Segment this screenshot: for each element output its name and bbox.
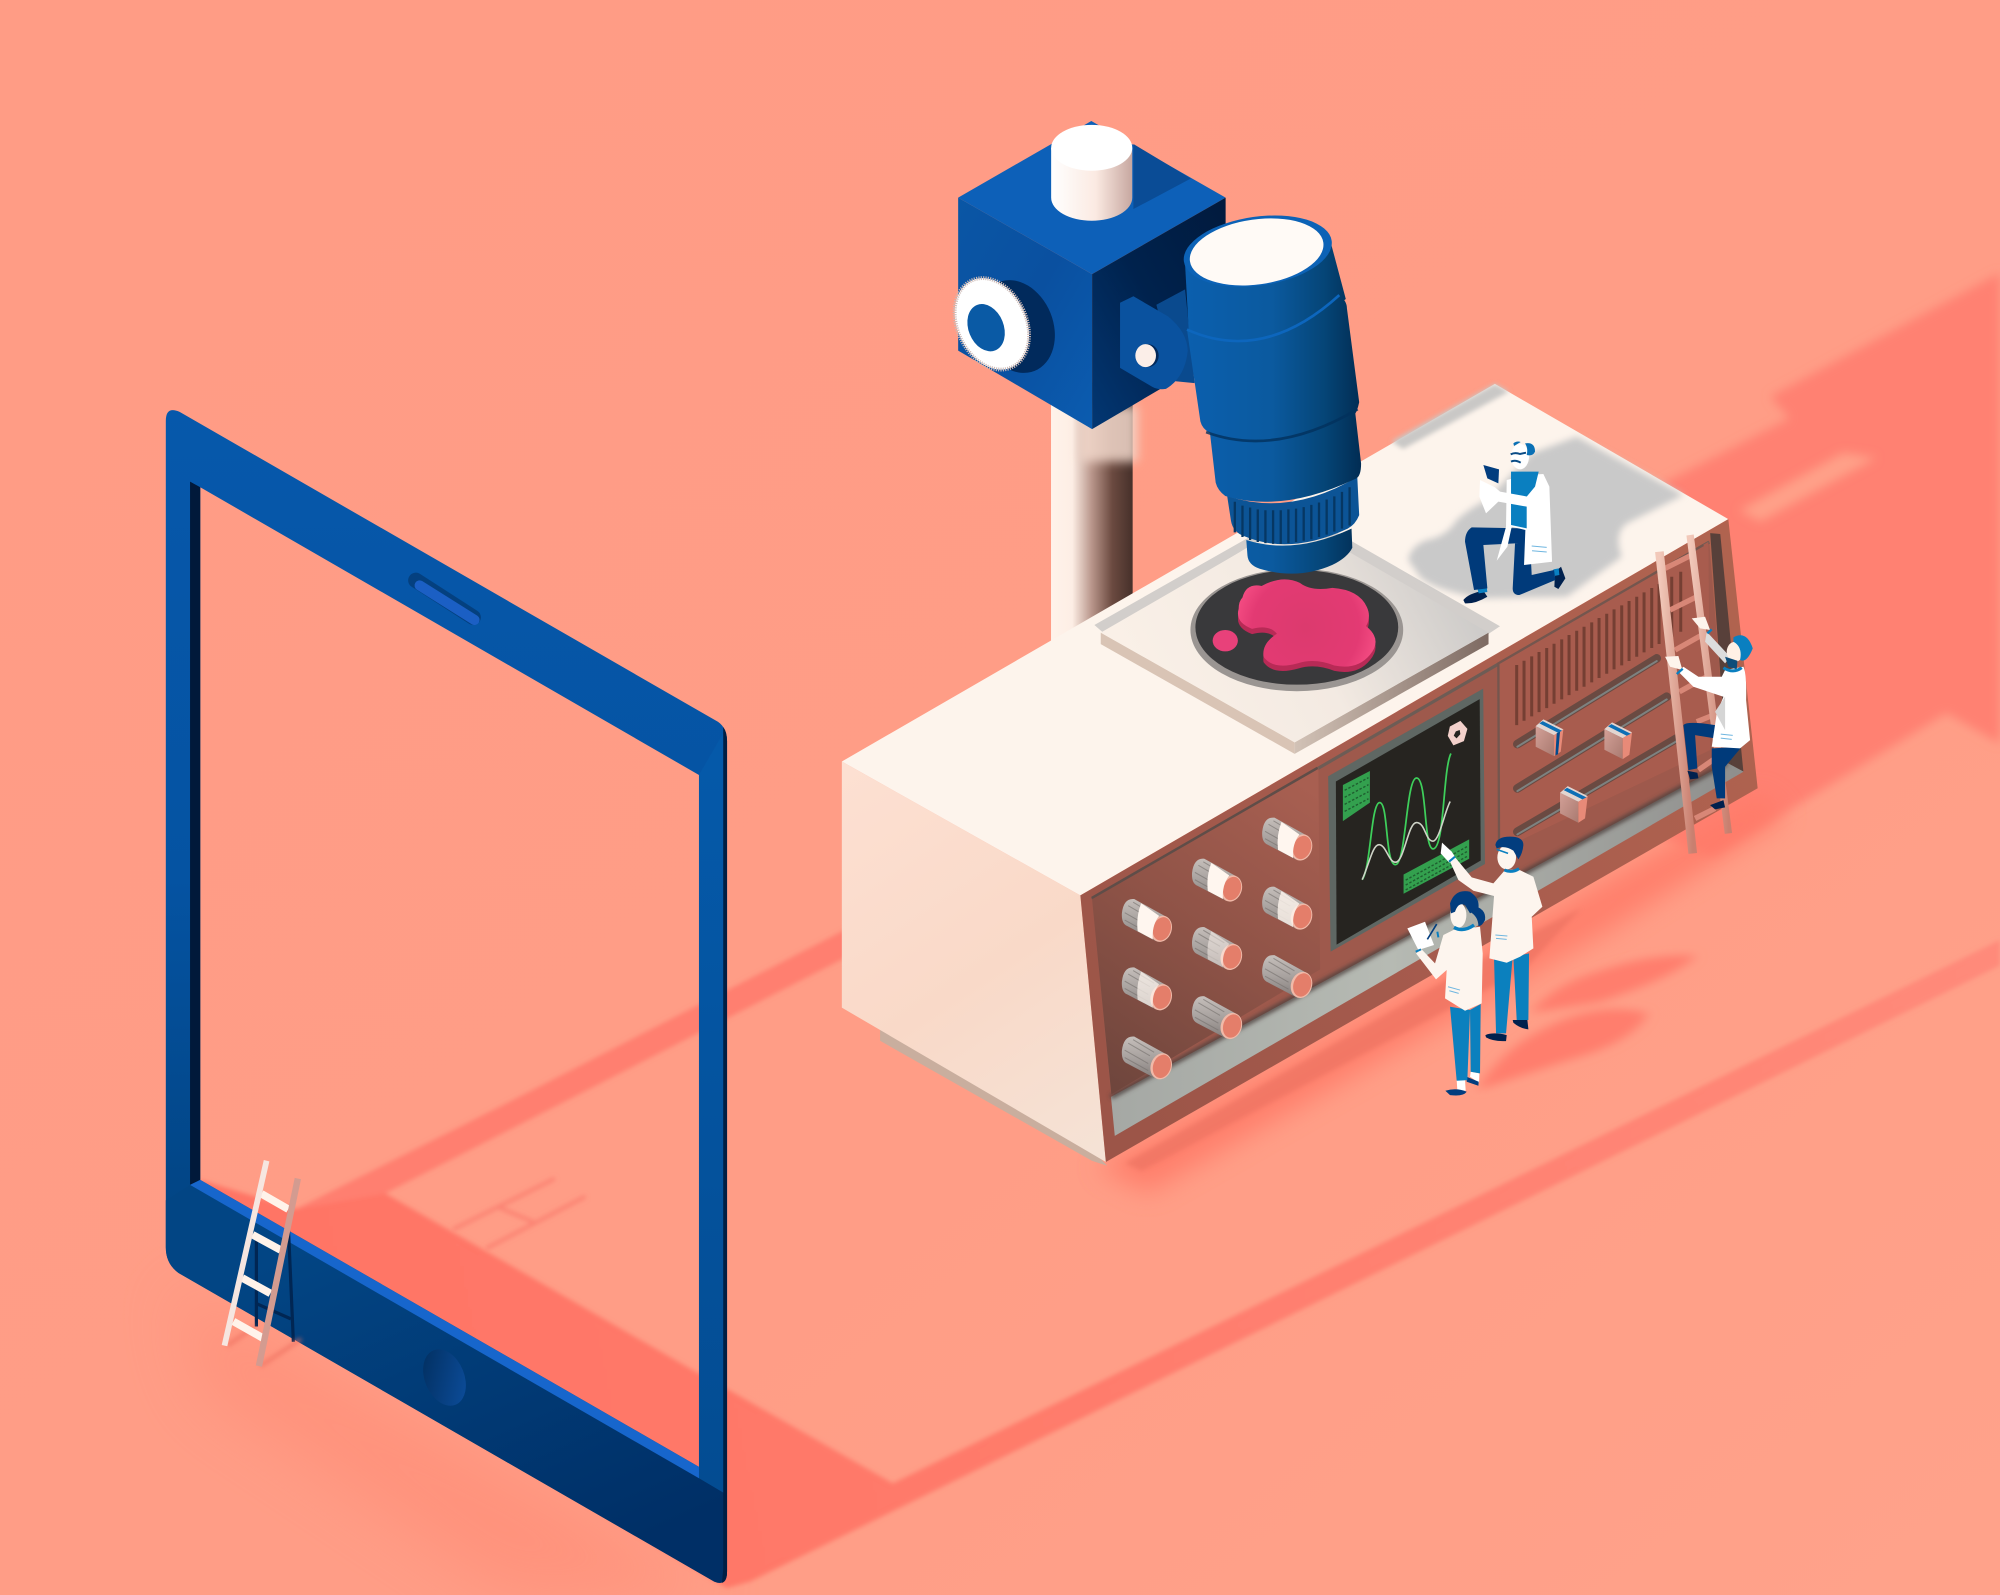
tablet: bottom bezel <box>166 1185 727 1583</box>
barrel: seam under sleeve <box>1206 409 1358 441</box>
shadow: woman <box>1476 1009 1648 1091</box>
screen: frame <box>1328 689 1485 952</box>
climber: beard <box>1725 657 1737 669</box>
shadow: bottom frame and long band <box>200 940 2000 1588</box>
woman at screen <box>1407 891 1485 1095</box>
cube: top shadow <box>1133 144 1191 209</box>
console: right recess <box>1710 533 1743 772</box>
knob 5 <box>1192 927 1245 973</box>
climber: shoes <box>1687 771 1725 809</box>
screen: text block scan lines <box>1345 778 1467 890</box>
small ladder: rungs <box>233 1194 288 1338</box>
pillar upper light <box>1079 406 1138 462</box>
slider track 2 <box>1517 697 1667 791</box>
man: legs <box>1494 953 1529 1033</box>
console: base <box>880 1028 1107 1166</box>
scientist kneeling on top <box>1463 442 1565 603</box>
barrel: middle section <box>1210 414 1361 502</box>
knobs <box>1122 818 1316 1082</box>
stage: left side <box>1101 633 1295 754</box>
console: front slanted face <box>1080 519 1758 1162</box>
shadows: scientists on floor <box>1476 955 1697 1091</box>
scientist climbing ladder <box>1665 617 1753 809</box>
vent panel <box>1498 542 1710 850</box>
vent slots <box>1517 572 1681 725</box>
kneeling: shoes <box>1463 567 1565 603</box>
climber: coat <box>1678 667 1750 748</box>
man: hair <box>1495 837 1523 859</box>
hinge pin <box>1135 344 1159 367</box>
man: pointing hand <box>1441 843 1456 863</box>
man at screen <box>1441 837 1542 1041</box>
climber: pocket <box>1721 734 1733 739</box>
kneeling: coat pocket <box>1532 546 1547 552</box>
specimen: small droplet <box>1213 630 1238 651</box>
dish: rim <box>1190 569 1403 691</box>
man: collar <box>1504 869 1519 871</box>
tablet: home button <box>415 1343 474 1412</box>
barrel: wide sleeve <box>1187 295 1359 443</box>
console: top face <box>842 384 1728 895</box>
small ladder: floor shadow <box>227 1327 301 1366</box>
screen: display <box>1336 699 1481 945</box>
shadow: soft machine contact shadow <box>1097 793 1786 1193</box>
slider handle 3 <box>1560 786 1588 823</box>
oscilloscope screen <box>1328 689 1485 952</box>
woman: pen <box>1427 924 1437 939</box>
pillar body <box>1051 383 1133 644</box>
kneeling: hair <box>1513 442 1535 455</box>
cube: left face <box>958 198 1092 429</box>
vent and slider panel <box>1498 542 1710 850</box>
microscope head <box>940 121 1361 574</box>
cube: right face <box>1092 198 1226 429</box>
specimen: blob <box>1238 579 1376 667</box>
dish: inner <box>1195 570 1398 685</box>
console: back shadow strip on top <box>1392 384 1509 449</box>
man: shoes <box>1485 1020 1528 1041</box>
knob 8 <box>1192 996 1245 1042</box>
woman: head <box>1450 902 1466 928</box>
petri dish with specimen <box>1190 569 1403 691</box>
screen: text block left <box>1343 771 1370 821</box>
knob 7 <box>1262 955 1316 1001</box>
tablet: right bezel <box>699 733 727 1495</box>
cap cylinder <box>1051 125 1132 221</box>
climber: head <box>1727 642 1743 662</box>
knob 4 <box>1262 887 1316 932</box>
woman: ponytail <box>1470 905 1485 926</box>
knob 1 <box>1262 818 1316 863</box>
vent panel edge <box>1498 545 1703 848</box>
climber: legs <box>1683 723 1742 798</box>
shadow: man <box>1530 955 1697 1013</box>
console ladder: rungs <box>1665 555 1715 818</box>
knob 6 <box>1122 967 1175 1013</box>
slider track 1 <box>1517 658 1657 747</box>
floor shadow: tablet frame cast shadow <box>200 918 2000 1588</box>
climber: hair <box>1733 635 1753 661</box>
slider track 3 <box>1517 738 1677 834</box>
man: head <box>1497 845 1516 869</box>
tablet: right edge <box>722 727 727 1583</box>
stage: right side <box>1295 633 1489 754</box>
man: coat <box>1450 858 1542 963</box>
console: grey shadow on top <box>1408 437 1683 598</box>
knob 9 <box>1122 1036 1175 1082</box>
console ladder: right rail <box>1690 535 1728 833</box>
focus knob: shadow <box>965 269 1068 384</box>
screen: grey curve <box>1362 802 1450 880</box>
tablet: frame body <box>166 410 727 1583</box>
machine pillar <box>1051 383 1138 644</box>
shadow: ladder on floor inside window <box>453 1179 585 1249</box>
small ladder on tablet <box>224 1161 301 1366</box>
barrel: knurled ring <box>1227 477 1359 544</box>
knob 3 <box>1122 899 1175 945</box>
barrel: top rim <box>1179 207 1336 296</box>
woman: pocket <box>1448 987 1460 993</box>
woman: collar <box>1454 925 1474 930</box>
tablet: ladder shadow on bezel <box>256 1224 293 1342</box>
woman: feet <box>1457 1072 1479 1091</box>
stage: top <box>1101 520 1489 742</box>
console ladder <box>1659 535 1728 853</box>
shadow: upper thin band <box>296 918 867 1209</box>
climber: raised arm <box>1705 632 1730 663</box>
slider handle 1 <box>1536 719 1563 756</box>
barrel: top section <box>1185 242 1346 345</box>
specimen: blob rim <box>1238 585 1376 672</box>
kneeling: small tablet <box>1483 465 1499 483</box>
tablet: speaker slot <box>416 580 474 620</box>
woman: notepad <box>1407 922 1434 950</box>
kneeling: socks <box>1477 568 1559 593</box>
specimen stage <box>1101 520 1489 754</box>
slider handle 2 <box>1604 722 1632 759</box>
barrel: sleeve highlight <box>1187 295 1339 341</box>
knob 2 <box>1192 859 1245 904</box>
console: knob panel <box>1092 767 1320 1094</box>
climber: coat fold <box>1715 697 1725 730</box>
focus knob: knurled ring <box>940 266 1043 382</box>
shadow: microscope and machine on right floor <box>1607 273 2000 857</box>
console: grey shelf <box>1111 763 1744 1136</box>
woman: legs <box>1450 1004 1481 1081</box>
tablet: inner bottom edge <box>190 1180 699 1478</box>
kneeling: glasses and moustache <box>1511 453 1526 463</box>
climber: cuffs <box>1677 629 1712 674</box>
climber: hands <box>1665 617 1710 670</box>
small ladder: left rail <box>224 1161 267 1346</box>
console: panel top line <box>1092 768 1318 898</box>
barrel: lower tip <box>1246 529 1352 574</box>
man: pocket <box>1495 935 1507 939</box>
focus knob: center <box>961 298 1012 357</box>
woman: cuffs <box>1416 932 1438 952</box>
console: recessed wall <box>1092 541 1727 1097</box>
console: shelf shadow line <box>1111 763 1727 1097</box>
kneeling: front leg <box>1465 527 1528 590</box>
scientists at the screen <box>1407 837 1542 1095</box>
kneeling: back leg <box>1513 542 1555 595</box>
console: recess top edge <box>1092 542 1709 899</box>
woman: hair <box>1450 891 1479 913</box>
light stripe inside shadow <box>1740 453 1876 522</box>
kneeling: coat <box>1497 474 1552 565</box>
console ladder: left rail <box>1659 552 1693 853</box>
instrument console <box>842 384 1758 1166</box>
tablet: inner left edge <box>190 482 200 1185</box>
hinge bracket <box>1120 296 1188 389</box>
tablet <box>166 410 727 1583</box>
hinge axle <box>1156 289 1195 383</box>
man: cuff <box>1449 857 1455 862</box>
screen: green curve <box>1362 753 1451 880</box>
cube: top face <box>958 121 1226 274</box>
barrel: white lens cap <box>1185 210 1328 293</box>
floor shadow: soft darkening under tablet <box>179 1288 721 1594</box>
woman: coat <box>1416 927 1483 1011</box>
focus knob <box>940 266 1068 384</box>
screen: logo <box>1448 721 1467 745</box>
console: stage shadow strips <box>1094 527 1500 634</box>
shadow: machine hard base shadow <box>1125 908 1582 1171</box>
kneeling: vest <box>1511 472 1539 528</box>
climber: collar <box>1723 668 1742 671</box>
screen: text block right <box>1404 839 1469 894</box>
kneeling: arms <box>1479 480 1532 513</box>
man: glasses <box>1497 849 1508 853</box>
small ladder: right rail <box>259 1179 298 1366</box>
kneeling: head <box>1511 444 1529 469</box>
woman: shoes <box>1445 1077 1479 1095</box>
console: left face <box>842 761 1106 1162</box>
